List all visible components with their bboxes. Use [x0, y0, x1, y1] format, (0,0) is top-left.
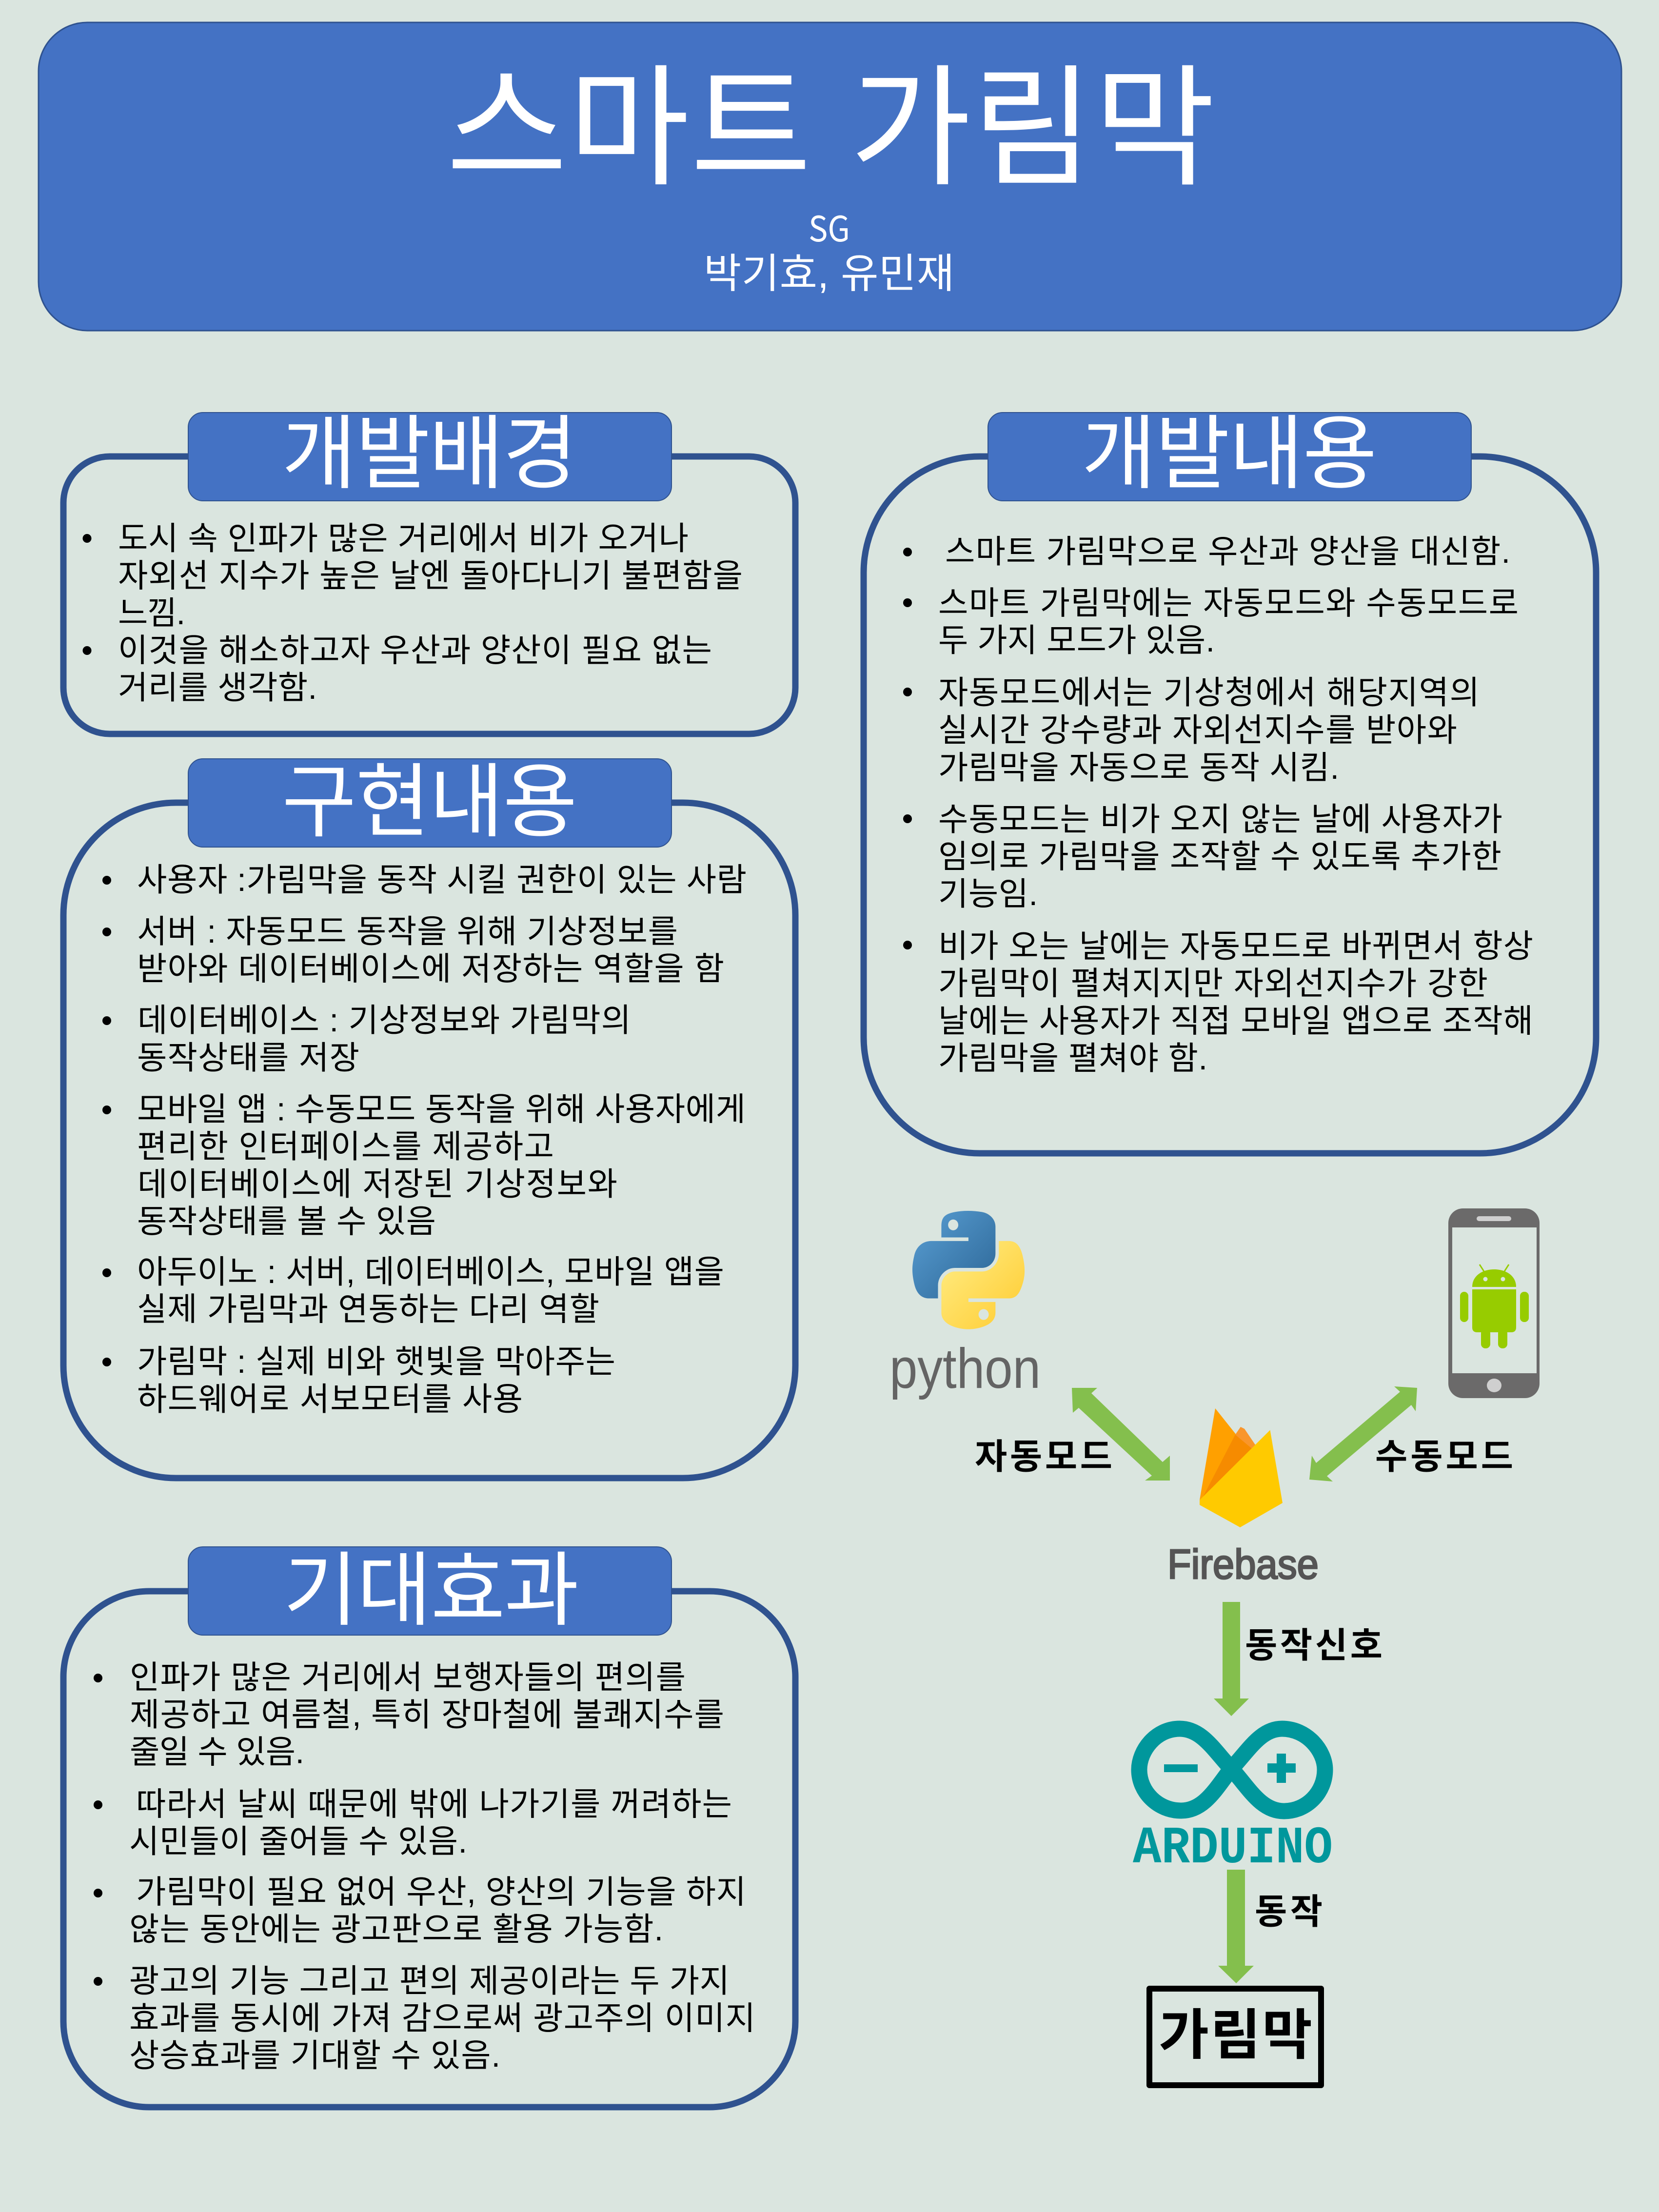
bullet: 데이터베이스: 동작상태를 저장	[137, 1040, 359, 1076]
bullet: 수동모드: 임의로 가림막을 조작할 수 있도록 추가한	[938, 839, 1501, 875]
bullet: 가림막: 하드웨어로 서보모터를 사용	[137, 1382, 523, 1418]
icon: firebase logo: Firebase	[1167, 1541, 1319, 1588]
bullet: 광고판: 않는 동안에는 광고판으로 활용 가능함.	[129, 1912, 663, 1948]
panel heading: 개발배경	[188, 409, 672, 501]
bullet: 가림막: 가림막 : 실제 비와 햇빛을 막아주는	[137, 1344, 615, 1380]
header banner	[39, 22, 1621, 331]
panel heading: 기대효과	[188, 1546, 672, 1636]
bullet: 수동모드	[903, 802, 1502, 912]
bullet: 날씨: 따라서 날씨 때문에 밖에 나가기를 꺼려하는	[136, 1787, 732, 1823]
arrow: arduino to curtain	[1218, 1870, 1254, 1983]
bullet: 자동모드	[903, 675, 1480, 786]
bullet: 편의: 줄일 수 있음.	[130, 1734, 304, 1770]
bullet: 해소: 거리를 생각함.	[118, 670, 317, 706]
box: 가림막: 가림막	[1159, 2005, 1312, 2066]
bullet: 해소: 이것을 해소하고자 우산과 양산이 필요 없는	[118, 633, 712, 669]
bullet: 두 가지 모드: 스마트 가림막에는 자동모드와 수동모드로	[938, 586, 1519, 622]
bullet: 편의: 인파가 많은 거리에서 보행자들의 편의를	[130, 1660, 686, 1696]
bullet: 불편함: 느낌.	[118, 595, 185, 632]
bullet: 데이터베이스: 데이터베이스 : 기상정보와 가림막의	[138, 1003, 631, 1039]
bullet: 자동모드: 자동모드에서는 기상청에서 해당지역의	[938, 675, 1480, 711]
bullet: 수동모드: 수동모드는 비가 오지 않는 날에 사용자가	[938, 802, 1502, 838]
bullet: 광고판: 가림막이 필요 없어 우산, 양산의 기능을 하지	[136, 1875, 746, 1911]
bullet: 비가 오는 날: 비가 오는 날에는 자동모드로 바뀌면서 항상	[938, 928, 1533, 965]
bullet: 모바일 앱: 동작상태를 볼 수 있음	[137, 1204, 436, 1240]
authors: 박기효, 유민재	[704, 251, 954, 296]
panel: 개발배경	[63, 409, 795, 734]
panel: 기대효과	[63, 1546, 795, 2107]
bullet: 불편함: 자외선 지수가 높은 날엔 돌아다니기 불편함을	[118, 558, 743, 594]
bullet: 모바일 앱	[102, 1092, 746, 1240]
icon: firebase logo	[1167, 1408, 1319, 1588]
label: 동작: 동작	[1255, 1893, 1323, 1932]
bullet: 모바일 앱: 편리한 인터페이스를 제공하고	[137, 1129, 554, 1165]
bullet: 이미지 상승: 광고의 기능 그리고 편의 제공이라는 두 가지	[129, 1963, 730, 1999]
bullet: 편의: 제공하고 여름철, 특히 장마철에 불쾌지수를	[130, 1697, 724, 1733]
panel heading: 구현내용: 구현내용	[282, 757, 577, 848]
icon: python logo: python	[889, 1337, 1041, 1400]
bullet: 수동모드: 기능임.	[938, 876, 1038, 912]
bullet: 해소	[83, 633, 712, 706]
bullet: 불편함: 도시 속 인파가 많은 거리에서 비가 오거나	[118, 521, 689, 557]
bullet: 비가 오는 날	[903, 928, 1533, 1077]
panel heading: 개발내용: 개발내용	[1082, 409, 1377, 499]
arrow: python firebase	[1072, 1388, 1170, 1481]
bullet: 아두이노	[102, 1254, 724, 1328]
arrow: android firebase	[1309, 1386, 1417, 1481]
bullet: 비가 오는 날: 가림막이 펼쳐지지만 자외선지수가 강한	[938, 966, 1488, 1002]
bullet: 편의	[94, 1660, 724, 1770]
box: 가림막	[1149, 1989, 1321, 2085]
bullet: 날씨	[94, 1787, 732, 1860]
bullet: 서버: 받아와 데이터베이스에 저장하는 역할을 함	[137, 951, 724, 988]
label: 동작신호: 동작신호	[1245, 1626, 1382, 1665]
panel heading: 기대효과: 기대효과	[283, 1546, 579, 1636]
icon: android phone	[1448, 1208, 1540, 1398]
bullet: 비가 오는 날: 날에는 사용자가 직접 모바일 앱으로 조작해	[938, 1004, 1533, 1040]
panel heading: 개발내용	[988, 409, 1471, 501]
bullet: 두 가지 모드	[903, 586, 1519, 659]
bullet: 모바일 앱: 모바일 앱 : 수동모드 동작을 위해 사용자에게	[137, 1092, 746, 1128]
title: 스마트 가림막	[446, 56, 1215, 202]
panel: 개발내용	[864, 409, 1596, 1153]
label: 수동모드: 수동모드	[1375, 1438, 1513, 1477]
bullet: 두 가지 모드: 두 가지 모드가 있음.	[938, 623, 1215, 659]
bullet: 아두이노: 아두이노 : 서버, 데이터베이스, 모바일 앱을	[137, 1254, 724, 1290]
team name: SG	[809, 200, 850, 252]
panel heading: 개발배경: 개발배경	[282, 409, 577, 499]
arrow: firebase to arduino	[1214, 1602, 1249, 1716]
bullet: 자동모드: 실시간 강수량과 자외선지수를 받아와	[938, 712, 1457, 749]
bullet: 자동모드: 가림막을 자동으로 동작 시킴.	[938, 750, 1339, 786]
bullet: 비가 오는 날: 가림막을 펼쳐야 함.	[938, 1041, 1207, 1077]
bullet: 이미지 상승: 상승효과를 기대할 수 있음.	[129, 2038, 500, 2074]
bullet: 대신함: 스마트 가림막으로 우산과 양산을 대신함.	[945, 534, 1510, 570]
bullet: 가림막	[102, 1344, 615, 1418]
bullet: 데이터베이스	[102, 1003, 631, 1076]
icon: python logo	[889, 1211, 1041, 1400]
bullet: 이미지 상승: 효과를 동시에 가져 감으로써 광고주의 이미지	[129, 2001, 755, 2037]
bullet: 아두이노: 실제 가림막과 연동하는 다리 역할	[137, 1292, 599, 1328]
bullet: 서버	[102, 914, 724, 988]
label: 자동모드: 자동모드	[975, 1438, 1112, 1477]
icon: arduino logo	[1133, 1729, 1333, 1878]
bullet: 광고판	[94, 1875, 746, 1948]
bullet: 불편함	[83, 521, 743, 632]
bullet: 사용자: 사용자 :가림막을 동작 시킬 권한이 있는 사람	[137, 862, 747, 898]
bullet: 날씨: 시민들이 줄어들 수 있음.	[129, 1824, 467, 1860]
bullet: 이미지 상승	[94, 1963, 755, 2074]
bullet: 서버: 서버 : 자동모드 동작을 위해 기상정보를	[137, 914, 678, 950]
panel: 구현내용	[63, 757, 795, 1478]
icon: arduino logo: ARDUINO	[1133, 1819, 1333, 1878]
panel heading: 구현내용	[188, 757, 672, 848]
bullet: 모바일 앱: 데이터베이스에 저장된 기상정보와	[138, 1166, 617, 1203]
